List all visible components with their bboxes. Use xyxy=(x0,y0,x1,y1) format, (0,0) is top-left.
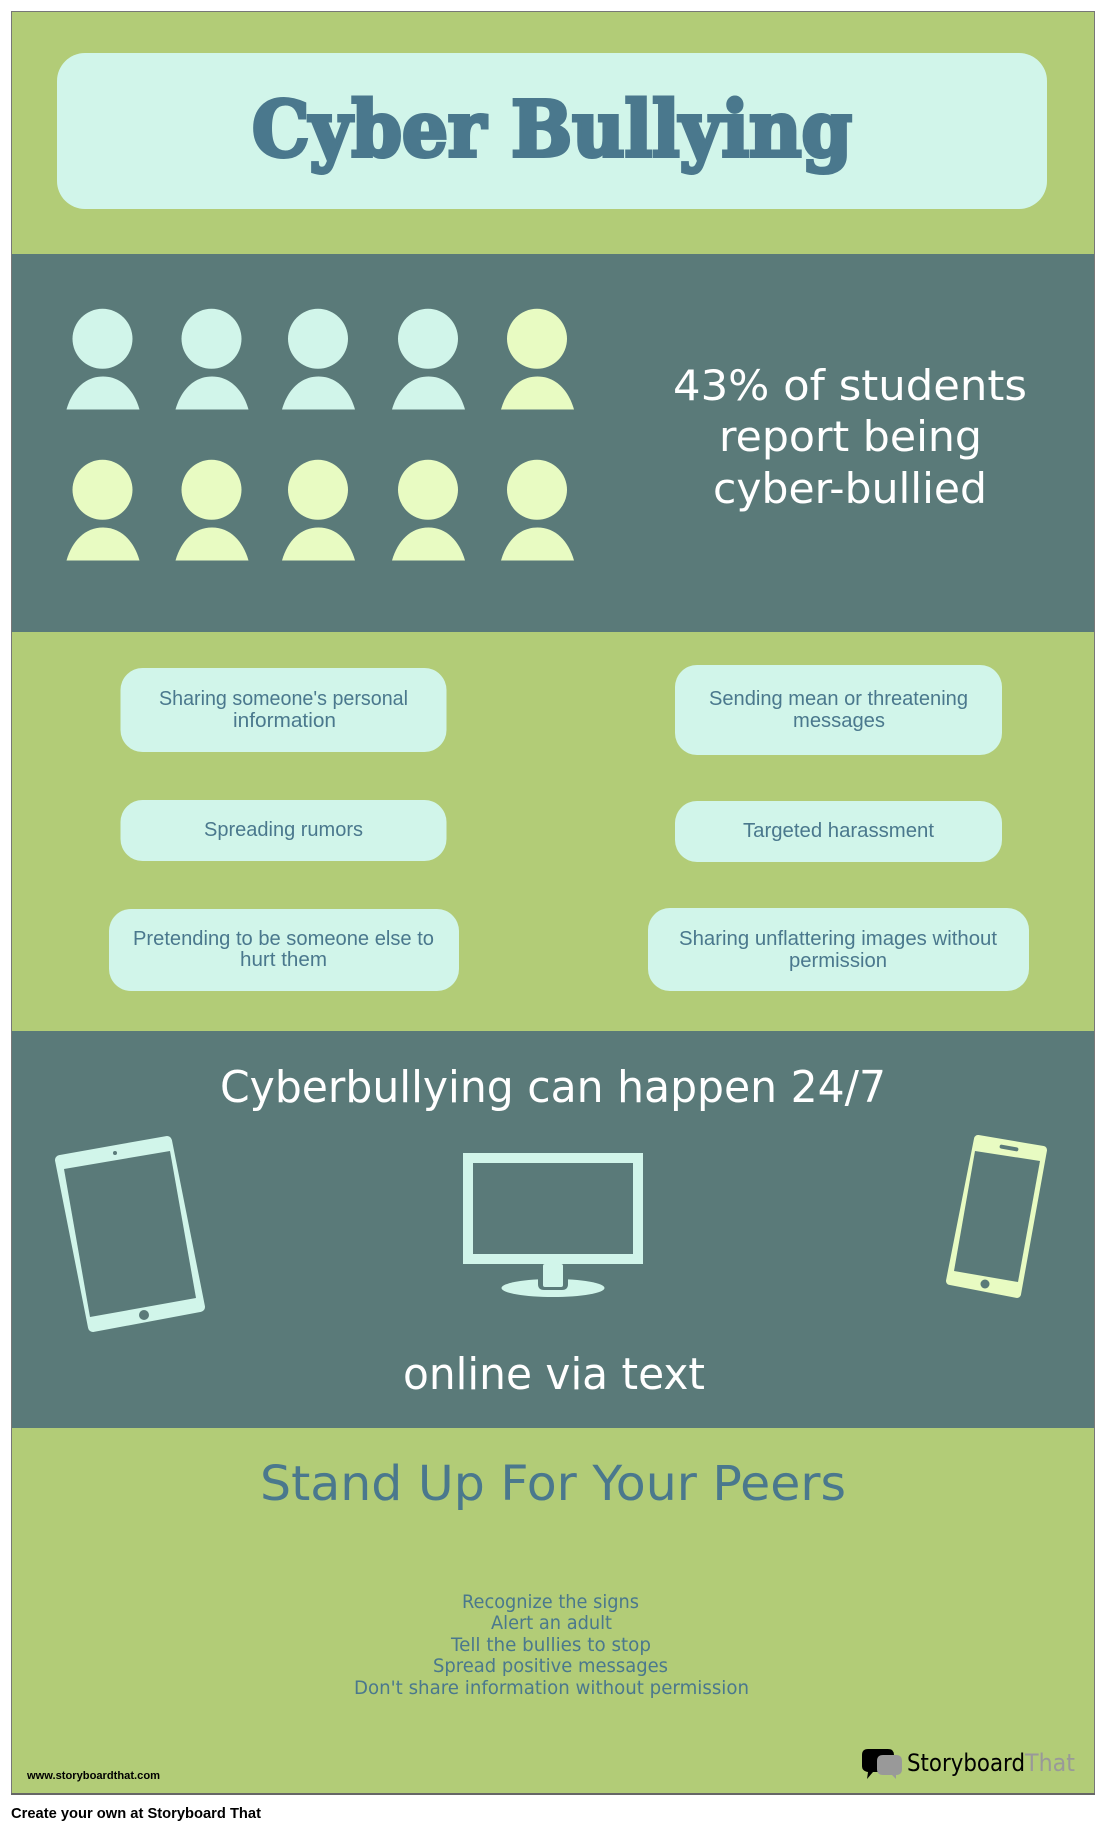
box: sending mean messages: Sending mean or threatening xyxy=(709,688,968,710)
person icon 10 xyxy=(501,460,574,560)
list of actions: Recognize the signs xyxy=(462,1591,639,1613)
logo: Storyboard That: Storyboard xyxy=(907,1749,1025,1777)
icon: smartphone xyxy=(950,1139,1043,1294)
panel: forms of cyberbullying xyxy=(109,665,1029,991)
statistic text: report being xyxy=(719,412,982,461)
box: pretending to be someone else xyxy=(109,909,459,991)
panel: stand up for your peers xyxy=(260,1456,846,1699)
person icon 9 xyxy=(392,460,465,560)
person icon 5 xyxy=(501,309,574,410)
panel: title xyxy=(57,53,1047,209)
list of actions: Spread positive messages xyxy=(433,1655,668,1677)
box: sharing unflattering images: permission xyxy=(789,950,887,972)
panel: statistic xyxy=(12,254,1094,632)
box: sharing personal information: information xyxy=(233,710,336,732)
heading: Cyberbullying can happen 24/7 xyxy=(220,1062,886,1113)
person icon 6 xyxy=(66,460,140,560)
footer link text: Create your own at Storyboard That xyxy=(11,1805,261,1822)
person icon 7 xyxy=(176,460,248,560)
box: spreading rumors: Spreading rumors xyxy=(204,819,363,841)
box: spreading rumors xyxy=(120,800,446,861)
box: sending mean messages: messages xyxy=(793,710,885,732)
box: sending mean messages xyxy=(675,665,1002,755)
heading: Stand Up For Your Peers xyxy=(260,1456,846,1512)
box: sharing personal information: Sharing someone's personal xyxy=(159,688,408,710)
website url: www.storyboardthat.com xyxy=(26,1770,160,1782)
box: pretending to be someone else: hurt them xyxy=(240,949,327,971)
list of actions: Don't share information without permission xyxy=(354,1677,749,1699)
caption: online via text xyxy=(403,1349,705,1400)
logo: Storyboard That: That xyxy=(1024,1749,1075,1777)
statistic text: 43% of students xyxy=(673,361,1027,410)
box: sharing unflattering images: Sharing unflattering images without xyxy=(679,928,997,950)
statistic text: cyber-bullied xyxy=(713,464,987,513)
box: sharing personal information xyxy=(120,668,446,752)
box: sharing unflattering images xyxy=(648,908,1029,991)
box: targeted harassment: Targeted harassment xyxy=(743,820,934,842)
person icon 2 xyxy=(176,309,248,410)
statistic text xyxy=(673,361,1027,513)
list of actions xyxy=(354,1591,749,1699)
box: targeted harassment xyxy=(675,801,1002,862)
person icon 1 xyxy=(66,309,140,410)
icon: desktop monitor xyxy=(468,1158,638,1297)
panel: cyberbullying can happen 24/7 xyxy=(12,1031,1094,1428)
person icon 8 xyxy=(282,460,355,560)
icon: tablet xyxy=(60,1141,200,1327)
list of actions: Alert an adult xyxy=(491,1612,612,1634)
person icon 4 xyxy=(392,309,465,410)
person icon 3 xyxy=(282,309,355,410)
box: pretending to be someone else: Pretending to be someone else to xyxy=(133,928,434,950)
title: Cyber Bullying xyxy=(252,85,852,175)
logo: Storyboard That xyxy=(862,1749,1075,1779)
list of actions: Tell the bullies to stop xyxy=(450,1634,651,1656)
